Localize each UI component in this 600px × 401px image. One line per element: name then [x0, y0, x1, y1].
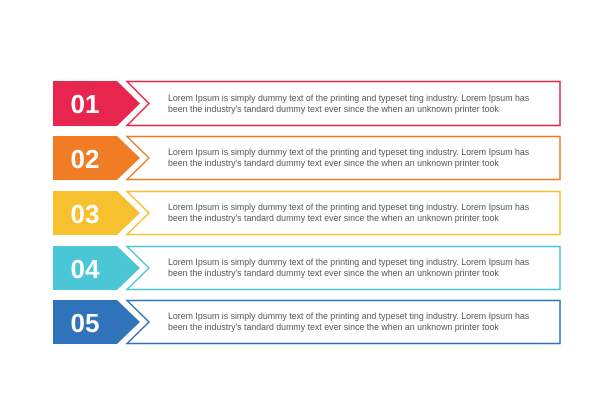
row 3 [53, 191, 560, 235]
text box 3: been the industry's tandard dummy text ever since the when an unknown printer took [168, 213, 499, 223]
badge 04: 04 [71, 254, 100, 284]
text box 3: Lorem Ipsum is simply dummy text of the printing and typeset ting industry. Lorem Ipsum has [168, 202, 530, 212]
text box 5: Lorem Ipsum is simply dummy text of the printing and typeset ting industry. Lorem Ipsum has [168, 311, 530, 321]
text box 5 [127, 300, 560, 344]
row 4 [53, 246, 560, 290]
badge 03: 03 [71, 199, 99, 229]
badge 02 [53, 136, 140, 180]
badge 02: 02 [71, 144, 99, 174]
text box 1: been the industry's tandard dummy text ever since the when an unknown printer took [168, 104, 499, 114]
row 1 [53, 81, 560, 126]
text box 2: Lorem Ipsum is simply dummy text of the printing and typeset ting industry. Lorem Ipsum has [168, 147, 530, 157]
row 2 [53, 136, 560, 180]
text box 2 [127, 136, 560, 180]
badge 01 [53, 81, 140, 126]
text box 3 [127, 192, 560, 234]
text box 4: Lorem Ipsum is simply dummy text of the printing and typeset ting industry. Lorem Ipsum has [168, 257, 530, 267]
text box 4: been the industry's tandard dummy text ever since the when an unknown printer took [168, 268, 499, 278]
row 5 [53, 300, 560, 344]
text box 2: been the industry's tandard dummy text ever since the when an unknown printer took [168, 158, 499, 168]
badge 05 [53, 300, 140, 344]
text box 1 [127, 82, 560, 126]
badge 03 [53, 191, 140, 235]
text box 4 [127, 246, 560, 290]
text box 1: Lorem Ipsum is simply dummy text of the printing and typeset ting industry. Lorem Ipsum has [168, 93, 530, 103]
badge 01: 01 [71, 89, 99, 119]
badge 05: 05 [71, 308, 99, 338]
badge 04 [53, 246, 140, 290]
text box 5: been the industry's tandard dummy text ever since the when an unknown printer took [168, 322, 499, 332]
